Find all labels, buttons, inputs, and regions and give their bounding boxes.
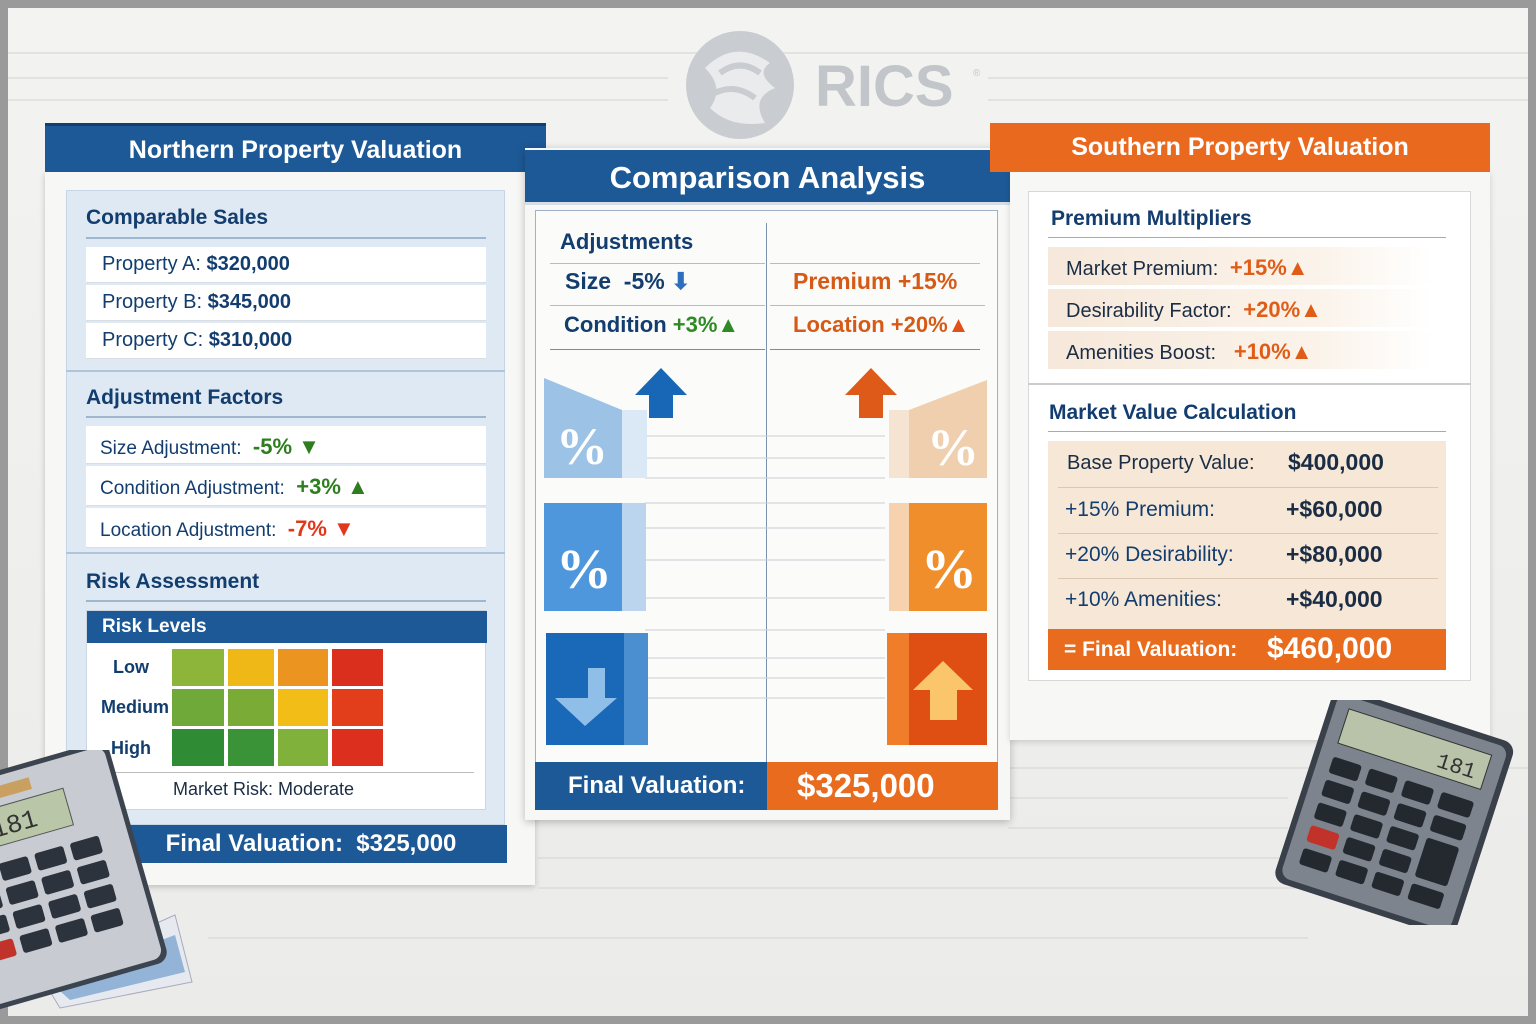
section: Market Value Calculation: +10% Amenities: [1065, 588, 1222, 611]
section: Comparable Sales: Comparable Sales [86, 206, 268, 229]
section: Market Value Calculation: +$80,000 [1286, 541, 1383, 567]
section: Adjustment Factors: Location Adjustment: -7% ▼ [100, 516, 355, 541]
chart: risk levels heatmap: Medium [101, 697, 169, 717]
text: adjustments left: Adjustments [560, 229, 693, 254]
section: Market Value Calculation: +$60,000 [1286, 496, 1383, 522]
heading: Northern: Northern Property Valuation [129, 136, 462, 164]
section: Market Value Calculation [1028, 383, 1471, 673]
callout: final valuation center [535, 762, 998, 810]
heading: Comparison Analysis [525, 150, 1010, 205]
section: Market Value Calculation: +15% Premium: [1065, 498, 1215, 521]
section: Premium Multipliers: Amenities Boost: +10%▲ [1066, 339, 1313, 364]
chart: risk levels heatmap: Low [113, 657, 149, 677]
section: Risk Assessment [66, 552, 505, 814]
panel: Comparison Analysis [525, 148, 1010, 820]
callout: final valuation south: $460,000 [1267, 632, 1392, 665]
panel: Southern Property Valuation [990, 123, 1492, 744]
chart: percentage blocks: % [556, 539, 612, 601]
chart: percentage blocks [544, 368, 987, 745]
text: adjustments right: Location +20%▲ [793, 312, 969, 337]
heading: Northern [45, 123, 546, 172]
text: adjustments right [770, 263, 985, 350]
section: Premium Multipliers: Premium Multipliers [1051, 207, 1252, 230]
section: Adjustment Factors: Size Adjustment: -5% ▼ [100, 434, 320, 459]
heading: Southern [990, 123, 1490, 172]
logo: RICS: ® [973, 68, 981, 79]
section: Premium Multipliers: Market Premium: +15%▲ [1066, 255, 1309, 280]
callout: final valuation south [1048, 629, 1446, 670]
text: adjustments left [550, 229, 765, 350]
chart: percentage blocks: % [927, 420, 979, 477]
section: Comparable Sales: Property A: $320,000 [102, 253, 290, 275]
section: Comparable Sales: Property B: $345,000 [102, 291, 291, 313]
logo: RICS: RICS [815, 54, 954, 119]
callout: final valuation north: Final Valuation: $325,000 [166, 830, 456, 857]
text: adjustments left: Size -5% ⬇ [565, 268, 690, 294]
heading: Southern: Southern Property Valuation [1071, 133, 1409, 161]
callout: final valuation center: $325,000 [797, 767, 935, 804]
heading: Comparison Analysis: Comparison Analysis [610, 160, 925, 195]
chart: risk levels heatmap: Market Risk: Moderate [173, 779, 354, 799]
section: Market Value Calculation: Base Property Value: [1067, 452, 1255, 474]
section: Risk Assessment: Risk Assessment [86, 570, 259, 593]
icon: right calculator [1275, 700, 1514, 925]
section: Adjustment Factors: Adjustment Factors [86, 386, 283, 409]
chart: risk levels heatmap: High [111, 738, 151, 758]
callout: final valuation south: = Final Valuation: [1064, 638, 1237, 661]
section: Premium Multipliers [1048, 207, 1446, 369]
section: Market Value Calculation: $400,000 [1288, 449, 1384, 475]
text: adjustments right: Premium +15% [793, 268, 957, 294]
section: Premium Multipliers: Desirability Factor: +20%▲ [1066, 297, 1322, 322]
text: adjustments left: Condition +3%▲ [564, 312, 739, 337]
callout: final valuation center: Final Valuation: [568, 772, 745, 799]
panel: Northern Property Valuation [42, 123, 546, 890]
section: Adjustment Factors: Condition Adjustment: +3% ▲ [100, 474, 369, 499]
chart: risk levels heatmap: Risk Levels [102, 616, 207, 637]
icon: left calculator [0, 750, 192, 1010]
section: Comparable Sales [86, 206, 486, 359]
callout: final valuation north [115, 825, 507, 863]
chart: percentage blocks: % [921, 539, 977, 601]
section: Comparable Sales: Property C: $310,000 [102, 329, 292, 351]
section: Market Value Calculation: +20% Desirability: [1065, 543, 1234, 566]
section: Market Value Calculation: Market Value Calculation [1049, 401, 1296, 424]
section: Market Value Calculation: +$40,000 [1286, 586, 1383, 612]
icon: right calculator: 181 [1433, 749, 1479, 785]
chart: risk levels heatmap [86, 610, 486, 810]
logo: RICS [686, 31, 981, 139]
section: Adjustment Factors [66, 370, 505, 550]
chart: percentage blocks: % [556, 419, 608, 476]
